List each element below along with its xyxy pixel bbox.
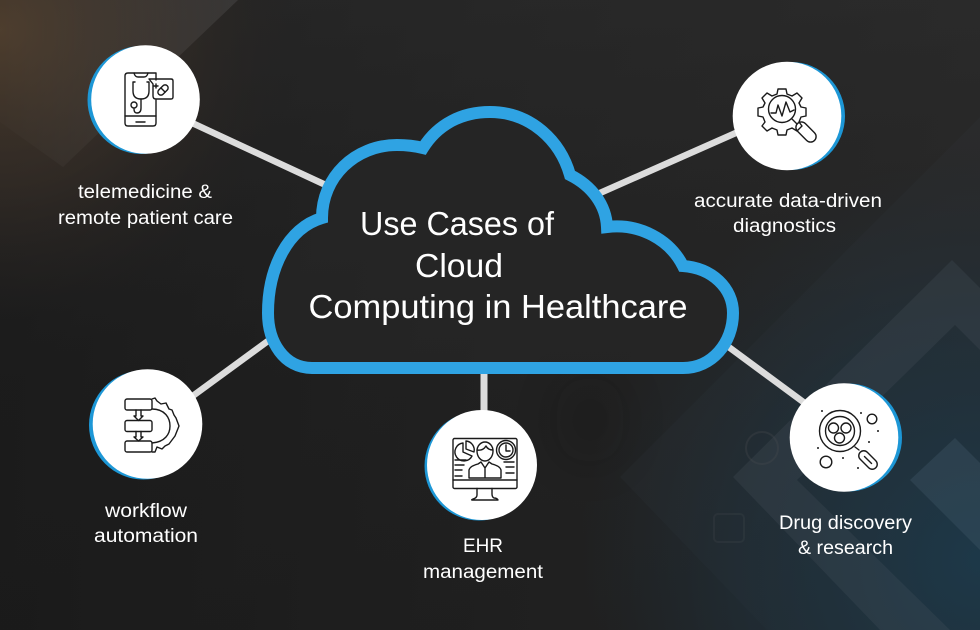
connector: workflow <box>190 338 272 398</box>
label: workflow <box>104 501 187 522</box>
label <box>779 513 913 559</box>
connector: EHR <box>480 370 488 415</box>
label: telemedicine & <box>78 182 212 203</box>
title: Computing in Healthcare <box>308 288 688 325</box>
icon dots <box>817 410 879 469</box>
node: EHR management <box>423 410 544 583</box>
title: Cloud <box>415 247 503 284</box>
label: management <box>423 562 544 583</box>
node: drug discovery <box>779 383 913 559</box>
connector: drug discovery <box>726 345 806 404</box>
node: diagnostics <box>694 62 882 237</box>
title <box>308 205 688 325</box>
label: diagnostics <box>733 216 836 237</box>
icon: magnifier with molecules <box>820 410 879 471</box>
label: EHR <box>463 536 503 557</box>
label: automation <box>94 526 198 547</box>
node: workflow automation <box>89 369 202 547</box>
title: Use Cases of <box>360 205 555 242</box>
label <box>423 536 544 583</box>
icon: phone with stethoscope <box>125 73 173 126</box>
connector: diagnostics <box>600 132 738 193</box>
icon: monitor with doctor <box>453 438 517 500</box>
central cloud <box>268 112 733 368</box>
label: & research <box>798 538 893 559</box>
label: accurate data-driven <box>694 191 882 212</box>
label: remote patient care <box>58 208 233 229</box>
node: telemedicine <box>58 45 233 229</box>
label <box>694 191 882 237</box>
icon: gear with magnifier <box>758 89 818 144</box>
icon: workflow gear <box>125 398 179 452</box>
label: Drug discovery <box>779 513 913 534</box>
connector: telemedicine <box>190 122 330 187</box>
label <box>94 501 198 547</box>
label <box>58 182 233 229</box>
